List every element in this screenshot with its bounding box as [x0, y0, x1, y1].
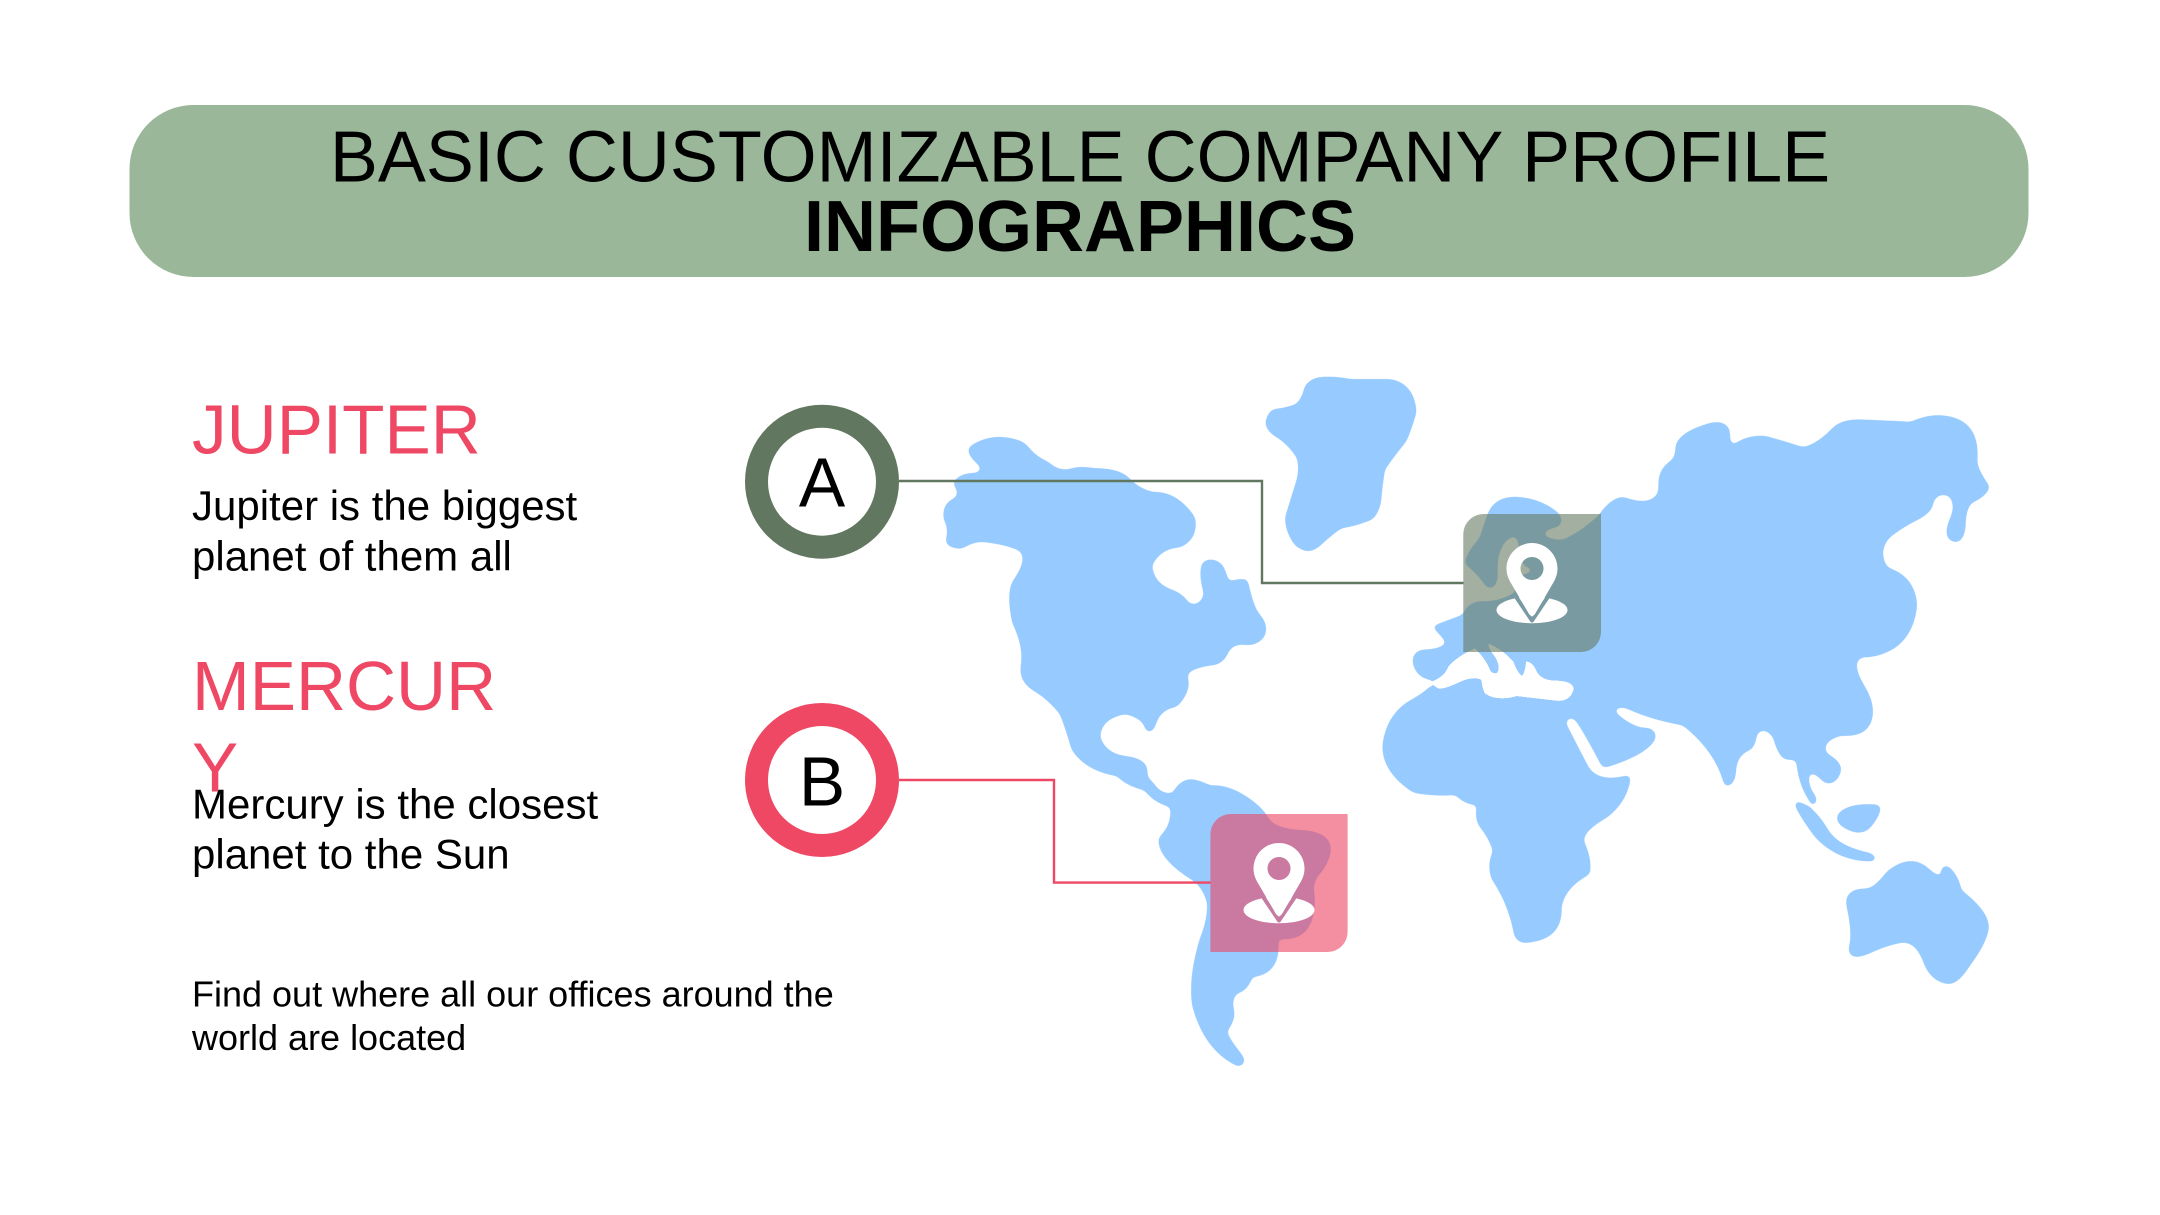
- world map: [944, 377, 1989, 1066]
- map: Asia and Africa: [1383, 416, 1989, 942]
- connector B: circle to South America marker: [899, 780, 1210, 883]
- text block: Mercury: Y: [192, 728, 238, 806]
- marker B: South America location: [1210, 814, 1348, 952]
- title text: BASIC CUSTOMIZABLE COMPANY PROFILE: [330, 118, 1830, 198]
- text block: Jupiter: JUPITER: [192, 390, 481, 468]
- badge B: [756, 714, 888, 846]
- map: the Americas: [944, 437, 1330, 1066]
- title banner: [130, 105, 2028, 277]
- map: Australia: [1847, 862, 1988, 984]
- text block: Mercury: MERCUR: [192, 647, 496, 725]
- map: Greenland: [1266, 377, 1416, 551]
- text block: Jupiter: Jupiter is the biggest: [192, 482, 578, 529]
- icon: map pin B: [1244, 843, 1314, 923]
- connector A: circle to Europe marker: [899, 481, 1464, 583]
- badge A: [756, 416, 888, 547]
- text block: Mercury: Mercury is the closest: [192, 780, 598, 827]
- map: Mediterranean Sea: [1432, 643, 1573, 701]
- text block: Mercury: [192, 647, 598, 877]
- map: Borneo: [1837, 805, 1880, 832]
- icon: map pin A: [1496, 543, 1568, 623]
- marker A: Europe location: [1463, 514, 1601, 652]
- title text: [330, 118, 1830, 267]
- badge B: B: [799, 742, 845, 820]
- text block: Jupiter: planet of them all: [192, 532, 512, 580]
- text block: footer note: [191, 974, 834, 1058]
- text block: footer note: world are located: [191, 1017, 466, 1058]
- text block: Mercury: planet to the Sun: [192, 830, 510, 877]
- text block: Jupiter: [192, 390, 578, 580]
- title text: INFOGRAPHICS: [804, 187, 1356, 267]
- map: land masses: [944, 377, 1989, 1066]
- text block: footer note: Find out where all our offices around the: [192, 974, 834, 1015]
- map: Europe: [1413, 497, 1617, 713]
- map: Indonesia: [1795, 801, 1876, 861]
- badge A: A: [799, 444, 846, 522]
